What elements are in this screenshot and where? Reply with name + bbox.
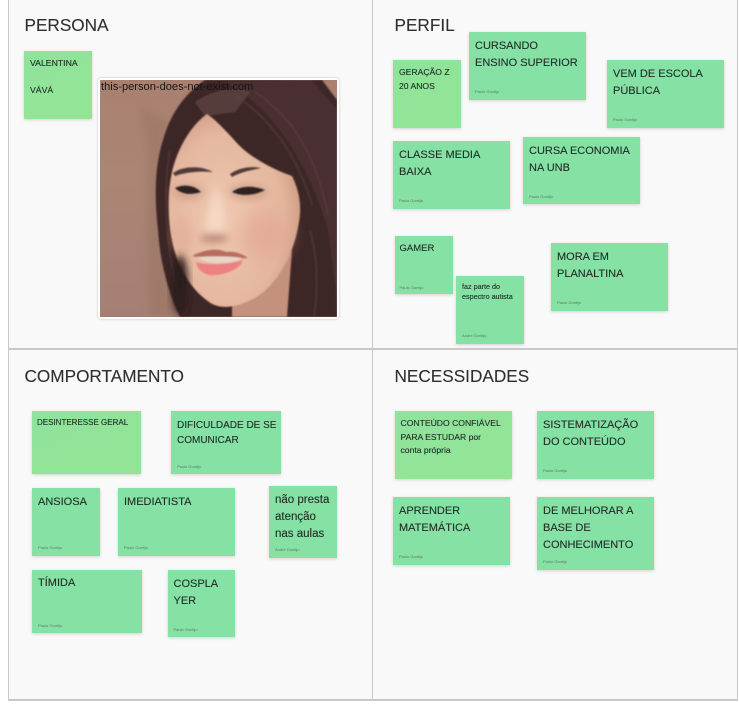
sticky note: mora em planaltina: PLANALTINA (557, 268, 623, 280)
heading: comportamento: COMPORTAMENTO (24, 366, 184, 386)
sticky note: aprender matemática: Paulo Gontijo (399, 554, 423, 559)
background fabric (100, 80, 337, 317)
sticky note: conteúdo confiável: PARA ESTUDAR por (400, 432, 481, 442)
sticky note: cursa economia (523, 136, 640, 204)
sticky note: cosplayer: Paulo Gontijo (174, 626, 198, 632)
sticky note: melhorar base: DE MELHORAR A (543, 504, 633, 516)
sticky note: imediatista: IMEDIATISTA (124, 496, 191, 508)
eye sockets (172, 184, 204, 200)
sticky note: sistematização: SISTEMATIZAÇÃO (543, 419, 638, 431)
nose (200, 185, 228, 242)
sticky note: dificuldade de se comunicar: COMUNICAR (177, 435, 239, 446)
sticky note: aprender matemática (393, 497, 510, 564)
sticky note: desinteresse geral (32, 411, 141, 474)
sticky note: espectro autista (456, 276, 524, 344)
sticky note: gamer: Paulo Gontijo (400, 284, 424, 290)
sticky note: geração z (393, 60, 461, 128)
sticky note: cursando ensino superior (469, 32, 586, 100)
sticky note: não presta atenção: André Gontijo (275, 546, 299, 552)
sticky note: ansiosa (32, 488, 100, 556)
sticky note: vem de escola pública: Paulo Gontijo (613, 117, 637, 122)
sticky note: melhorar base: BASE DE (543, 522, 591, 534)
sticky note: geração z: 20 ANOS (399, 80, 435, 90)
sticky note: conteúdo confiável: CONTEÚDO CONFIÁVEL (400, 418, 501, 428)
sticky note: conteúdo confiável (394, 411, 512, 479)
sticky note: tímida: TÍMIDA (38, 576, 75, 588)
sticky note: gamer (394, 236, 453, 294)
heading: necessidades: NECESSIDADES (394, 366, 529, 386)
sticky note: ansiosa: Paulo Gontijo (38, 545, 62, 550)
sticky note: aprender matemática: APRENDER (399, 505, 460, 517)
sticky note: cursa economia: NA UNB (529, 162, 570, 174)
sticky note: classe media baixa: Paulo Gontijo (399, 198, 423, 203)
sticky note: mora em planaltina: MORA EM (557, 251, 609, 263)
hair (156, 80, 337, 317)
mouth (192, 250, 248, 275)
sticky note: melhorar base (537, 496, 654, 570)
sticky note: vem de escola pública (607, 60, 724, 128)
sticky note: espectro autista: espectro autista (462, 292, 513, 301)
sticky note: não presta atenção (269, 486, 337, 558)
sticky note: cursando ensino superior: CURSANDO (475, 40, 538, 52)
face (169, 114, 300, 307)
sticky note: melhorar base: Paulo Gontijo (543, 558, 567, 564)
sticky note: tímida (32, 570, 142, 632)
neck (232, 250, 292, 317)
sticky note: imediatista: Paulo Gontijo (124, 545, 148, 550)
sticky note: cosplayer: YER (174, 594, 196, 606)
sticky note: imediatista (118, 488, 235, 556)
sticky note: conteúdo confiável: conta própria (400, 445, 451, 455)
sticky note: classe media baixa (393, 141, 510, 208)
sticky note: cursando ensino superior: Paulo Gontijo (475, 89, 499, 94)
panel: perfil (372, 0, 738, 350)
eyes (175, 186, 265, 195)
sticky note: geração z: GERAÇÃO Z (399, 67, 450, 77)
sticky note: cursa economia: CURSA ECONOMIA (529, 144, 630, 156)
heading: persona: PERSONA (24, 15, 109, 35)
sticky note: classe media baixa: CLASSE MEDIA (399, 149, 480, 161)
eyebrows (173, 167, 261, 177)
panel: necessidades (372, 350, 738, 700)
cheek blush (241, 211, 289, 259)
sticky note: desinteresse geral: DESINTERESSE GERAL (37, 418, 128, 427)
sticky note: dificuldade de se comunicar (171, 411, 281, 474)
sticky note: cursa economia: Paulo Gontijo (529, 194, 553, 198)
heading: perfil: PERFIL (394, 15, 455, 35)
sticky note: tímida: Paulo Gontijo (38, 622, 62, 628)
photo caption: this-person-does-not-exist.com (101, 81, 253, 93)
sticky note: valentina: VÁVÁ (30, 84, 53, 94)
sticky note: não presta atenção: não presta (275, 494, 329, 506)
sticky note: não presta atenção: atenção (275, 510, 316, 522)
portrait photo (98, 78, 339, 319)
sticky note: mora em planaltina (551, 243, 668, 310)
sticky note: ansiosa: ANSIOSA (38, 496, 87, 508)
sticky note: sistematização: Paulo Gontijo (543, 468, 567, 473)
sticky note: mora em planaltina: Paulo Gontijo (557, 300, 581, 305)
sticky note: não presta atenção: nas aulas (275, 528, 324, 540)
sticky note: espectro autista: faz parte do (462, 282, 500, 291)
sticky note: valentina: VALENTINA (30, 58, 78, 68)
sticky note: gamer: GAMER (400, 242, 434, 254)
sticky note: dificuldade de se comunicar: Paulo Gontijo (177, 464, 201, 469)
sticky note: espectro autista: André Gontijo (462, 333, 486, 338)
panel: persona (8, 0, 372, 350)
sticky note: cosplayer: COSPLA (174, 578, 218, 590)
sticky note: dificuldade de se comunicar: DIFICULDADE DE SE (177, 420, 276, 430)
hair strands (166, 92, 328, 317)
sticky note: sistematização (537, 411, 654, 479)
sticky note: classe media baixa: BAIXA (399, 166, 431, 178)
sticky note: melhorar base: CONHECIMENTO (543, 538, 633, 550)
sticky note: aprender matemática: MATEMÁTICA (399, 522, 470, 534)
sticky note: sistematização: DO CONTEÚDO (543, 436, 626, 448)
sticky note: cursando ensino superior: ENSINO SUPERIOR (475, 57, 578, 69)
sticky note: cosplayer (168, 570, 235, 637)
sticky note: valentina (24, 51, 92, 118)
sticky note: vem de escola pública: VEM DE ESCOLA (613, 68, 703, 80)
panel: comportamento (8, 350, 372, 700)
sticky note: vem de escola pública: PÚBLICA (613, 85, 660, 97)
